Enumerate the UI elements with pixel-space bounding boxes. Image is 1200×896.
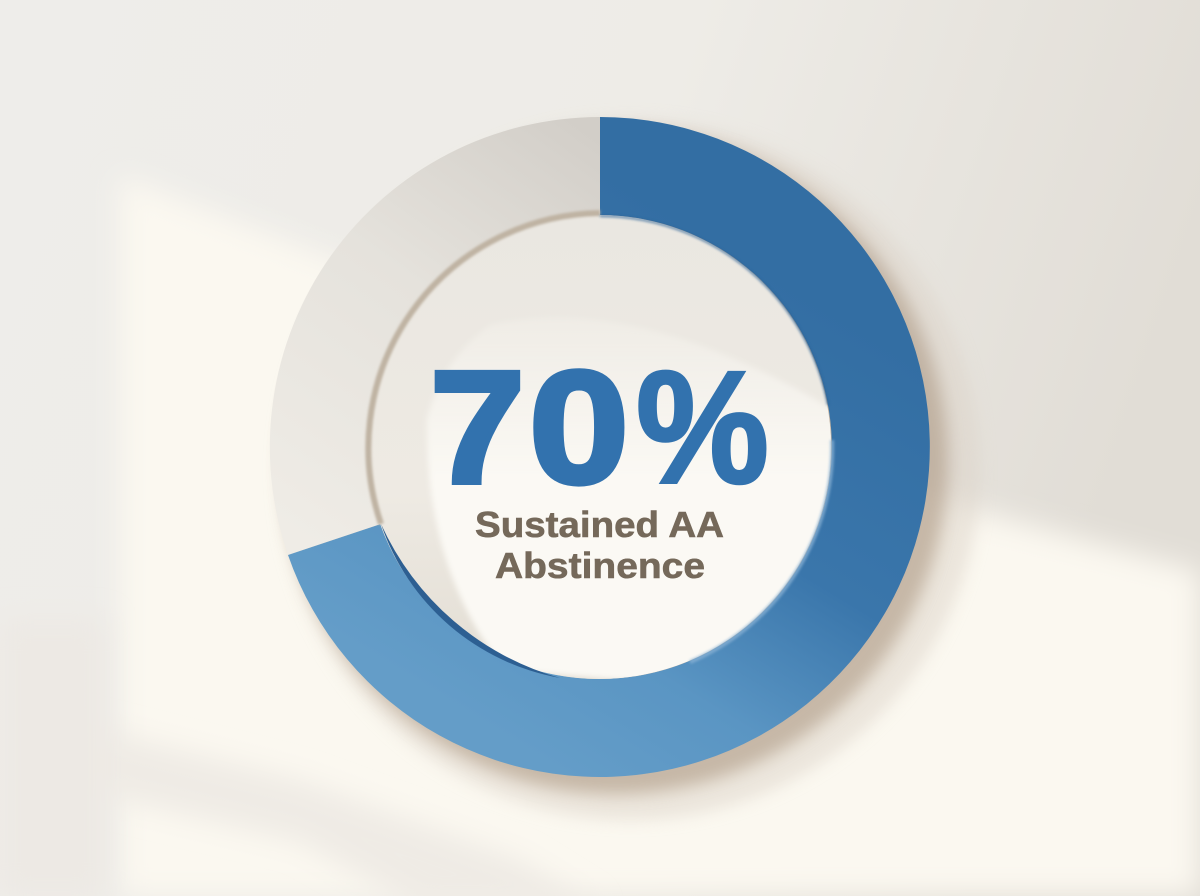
value segment: 70% blue (288, 117, 930, 777)
remaining segment: 30% grey (270, 117, 600, 555)
diagonal window shadow, lower left (60, 720, 600, 896)
inner bevel, grey side (368, 213, 600, 524)
headline value: 70% (430, 338, 769, 516)
tight donut contact shadow (284, 130, 948, 794)
digit 0: 0 (529, 338, 629, 516)
inner wall, dark blue crescent (381, 524, 560, 678)
donut centre opening (367, 213, 850, 700)
label line 2: Abstinence (495, 545, 705, 586)
digit 7: 7 (430, 338, 525, 516)
label line 1: Sustained AA (475, 504, 724, 545)
lower-left wall tone (0, 620, 105, 896)
inner wall, blue top edge (600, 216, 828, 405)
broad donut cast shadow (280, 120, 980, 820)
sunlight patch on wall (120, 176, 1200, 896)
label: Sustained AA Abstinence (475, 504, 724, 586)
donut chart (270, 117, 930, 777)
percent sign: % (636, 338, 769, 516)
inner rim highlight, lower right (690, 440, 832, 662)
